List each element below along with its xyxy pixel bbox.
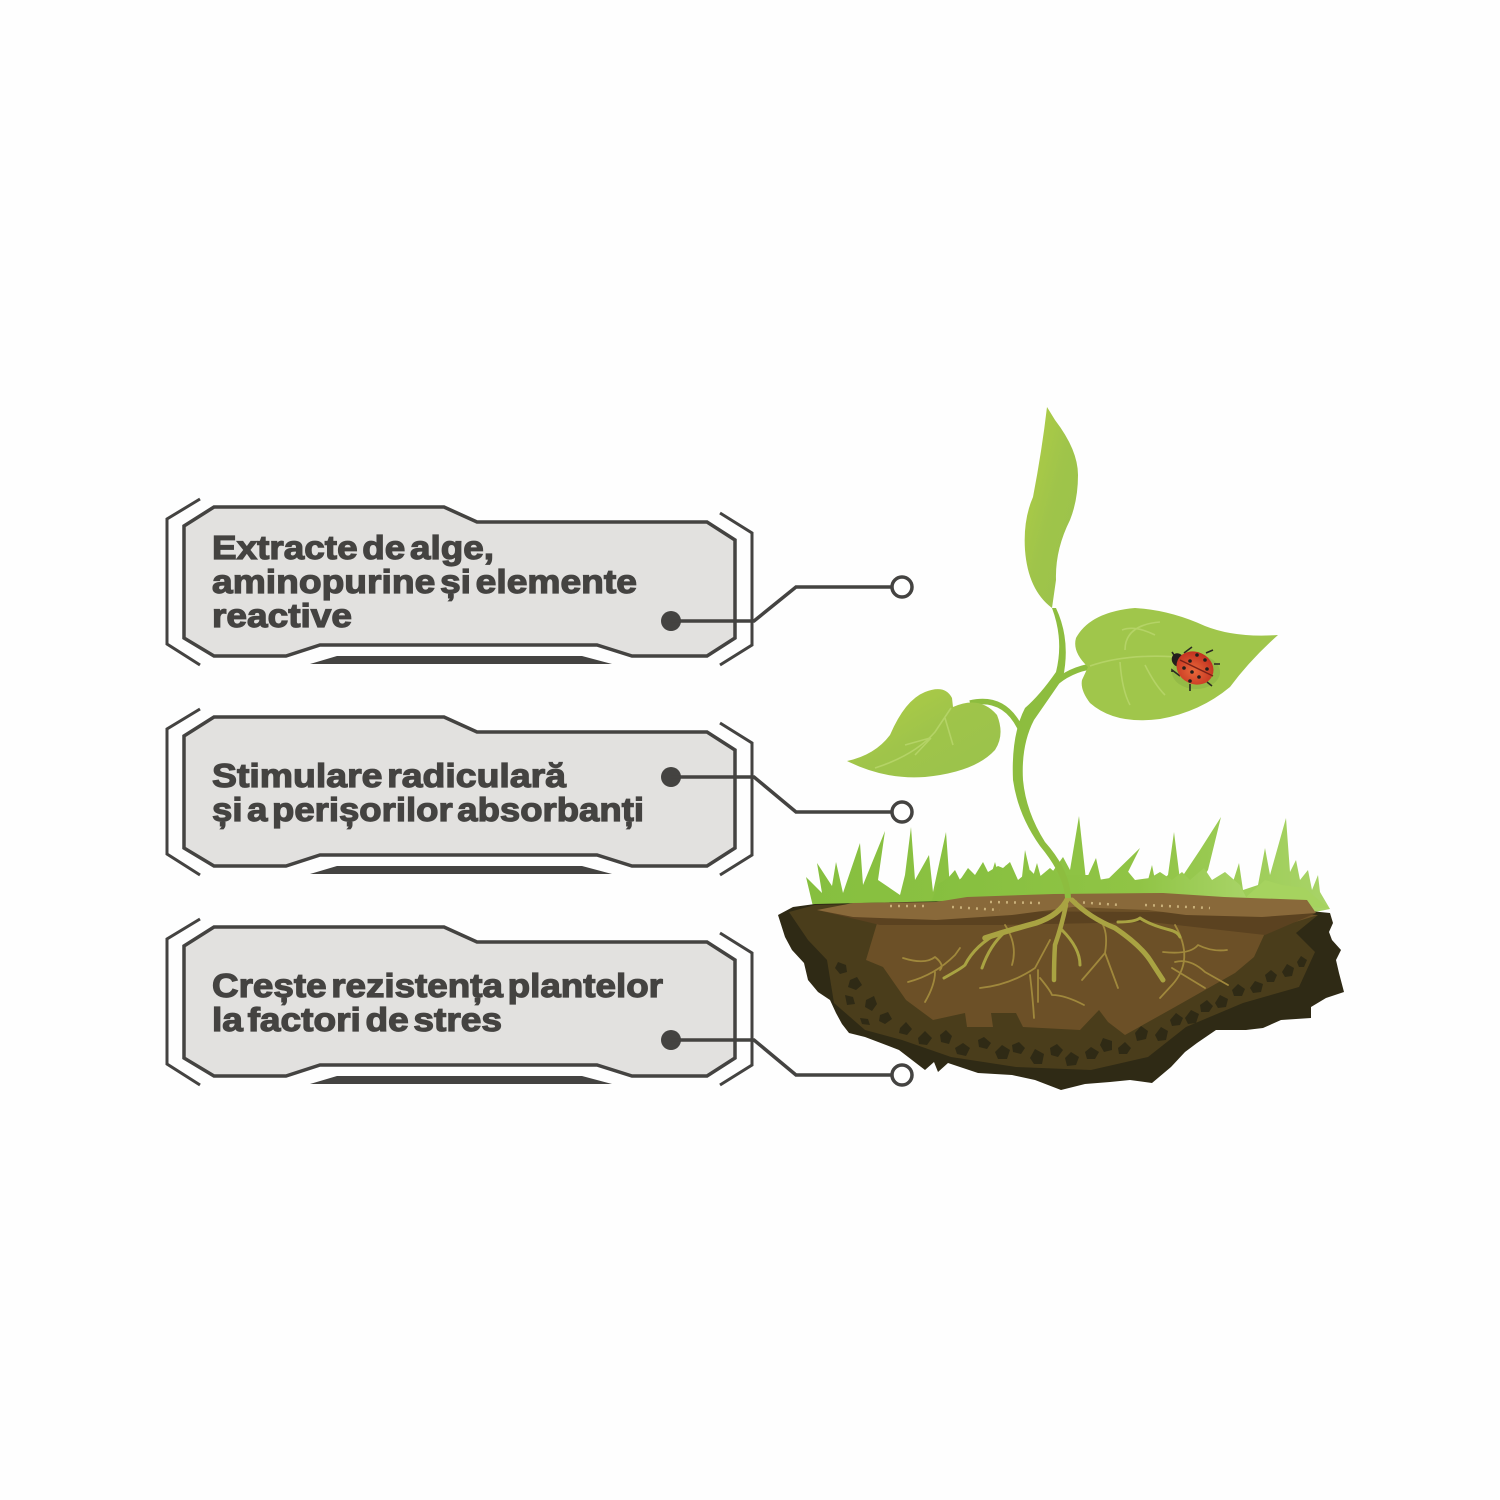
soil: lighter surface [817,893,1316,920]
illustration: plant in soil [778,407,1344,1090]
panel: Extracte de alge [167,499,912,665]
panel: Stimulare radiculară [167,709,912,875]
left leaf [847,689,1001,777]
text: reactive [212,597,352,634]
panel body [184,717,735,866]
text: la factori de stres [212,1001,502,1038]
soil: dark clumps [835,956,1307,1066]
soil: middle layer [789,901,1318,1070]
stem branch to left leaf [970,702,1021,730]
right bracket [720,933,752,1085]
right leaf [1075,608,1278,720]
text: Crește rezistența plantelor [212,967,663,1005]
icon: ladybug [1169,645,1220,691]
left bracket [167,709,200,875]
panel body [184,507,735,656]
top leaf [1025,407,1078,608]
text: aminopurine și elemente [212,563,637,601]
grass [806,816,1330,915]
right bracket [720,723,752,875]
panel: Crește rezistența [167,919,912,1085]
connector [661,577,912,631]
connector [661,767,912,822]
panel body [184,927,735,1076]
soil: surface specks [890,902,1210,910]
connector [661,1030,912,1085]
left bracket [167,919,200,1085]
text: Stimulare radiculară [212,757,567,794]
bottom bar [310,1076,612,1084]
right bracket [720,513,752,665]
left bracket [167,499,200,665]
stem [1013,608,1071,898]
soil: dark outer [778,900,1344,1090]
bottom bar [310,656,612,664]
soil: darker top band [817,910,1316,935]
thin roots [903,925,1228,1018]
bottom bar [310,866,612,874]
text: și a perișorilor absorbanți [212,791,644,829]
main roots [944,898,1180,980]
text: Extracte de alge, [212,529,494,566]
lighter grass leaf [1245,880,1330,909]
soil: brown body [866,905,1318,1035]
stem branch to right leaf [1048,667,1088,690]
